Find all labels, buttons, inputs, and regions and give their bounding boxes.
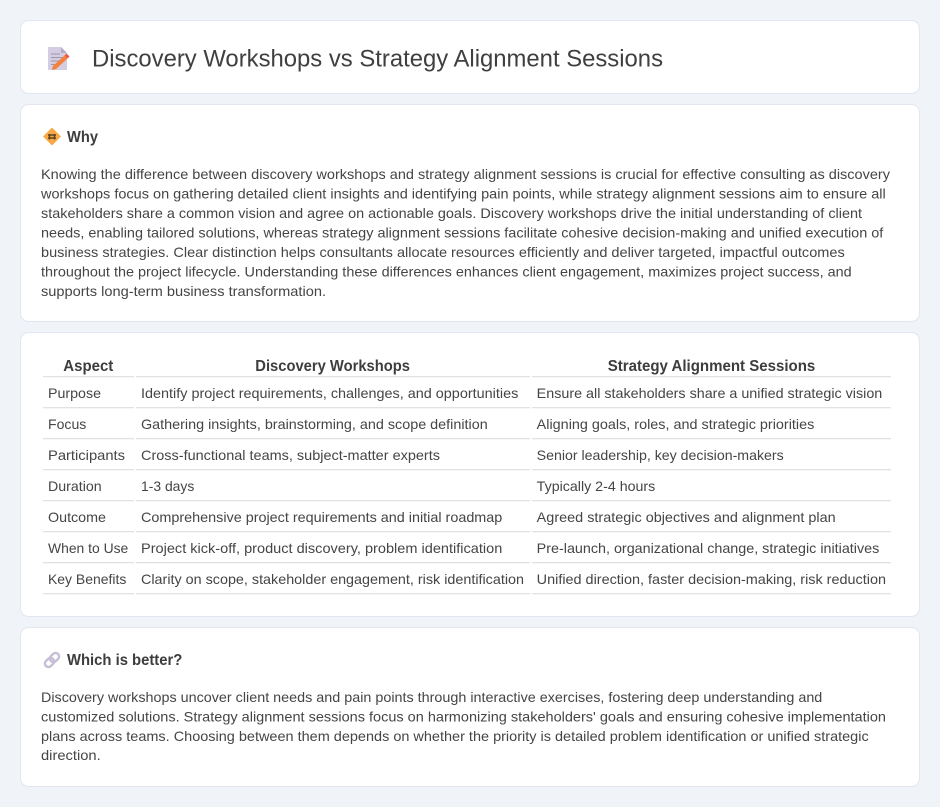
row: duration: 1-3 days (141, 478, 194, 494)
row: purpose (48, 385, 882, 401)
row: outcome (48, 509, 836, 525)
text block: why paragraph: throughout the project lifecycle. Understanding these differences enhances client engagement, maximizes project success, and (41, 264, 852, 280)
row: when to use (48, 540, 879, 556)
panel: why (20, 104, 920, 322)
text block: why paragraph: stakeholders share a common vision and agree on actionable goals. Discovery workshops drive the initial understanding of client (41, 205, 862, 221)
text block: why paragraph: business strategies. Clear distinction helps consultants allocate resources efficiently and deliver targeted, impactful outcomes (41, 244, 845, 260)
row: outcome: Agreed strategic objectives and alignment plan (537, 509, 836, 525)
heading: which is better: Which is better? (67, 652, 182, 669)
heading: why: Why (67, 129, 98, 146)
text block: which paragraph: direction. (41, 747, 101, 763)
text block: why paragraph: Knowing the difference between discovery workshops and strategy alignment sessions is crucial for effective consulting as discovery (41, 166, 890, 182)
row: key benefits: Clarity on scope, stakeholder engagement, risk identification (141, 571, 524, 587)
row: duration (48, 478, 655, 494)
row: focus: Gathering insights, brainstorming, and scope definition (141, 416, 488, 432)
text block: why paragraph: supports long-term business transformation. (41, 283, 326, 299)
row: when to use: Project kick-off, product discovery, problem identification (141, 540, 502, 556)
table header row: Discovery Workshops (255, 358, 410, 375)
row: when to use: Pre-launch, organizational change, strategic initiatives (537, 540, 879, 556)
row: participants (48, 447, 784, 463)
row: outcome: Outcome (48, 509, 106, 525)
row: duration: Typically 2-4 hours (537, 478, 655, 494)
row: participants: Participants (48, 447, 125, 463)
row: focus: Aligning goals, roles, and strategic priorities (537, 416, 814, 432)
text block: which paragraph (41, 689, 886, 763)
text block: which paragraph: plans across teams. Choosing between them depends on whether the priority is detailed problem identification or unified strategic (41, 728, 869, 744)
row: participants: Cross-functional teams, subject-matter experts (141, 447, 440, 463)
row: when to use: When to Use (48, 540, 128, 556)
row: focus (48, 416, 814, 432)
text block: why paragraph (40, 166, 890, 299)
row: duration: Duration (48, 478, 102, 494)
row: outcome: Comprehensive project requirements and initial roadmap (141, 509, 503, 525)
table header row (63, 358, 815, 375)
icon: construction diamond (44, 128, 60, 144)
text block: why paragraph: workshops focus on gathering detailed client insights and identifying pain points, while strategy alignment sessions aim to ensure all (40, 186, 886, 202)
table header row: Aspect (63, 358, 114, 375)
row: focus: Focus (48, 416, 86, 432)
text block: which paragraph: Discovery workshops uncover client needs and pain points through interactive exercises, fostering deep understanding and (41, 689, 822, 705)
row: purpose: Ensure all stakeholders share a unified strategic vision (537, 385, 882, 401)
row: key benefits: Unified direction, faster decision-making, risk reduction (537, 571, 886, 587)
row: participants: Senior leadership, key decision-makers (537, 447, 784, 463)
row: purpose: Purpose (48, 385, 101, 401)
row: key benefits: Key Benefits (48, 571, 126, 587)
panel: title header (20, 20, 920, 94)
text block: why paragraph: needs, enabling tailored solutions, whereas strategy alignment sessions facilitate cohesive decision-making and unified execution of (41, 224, 883, 240)
row: purpose: Identify project requirements, challenges, and opportunities (141, 385, 518, 401)
table header row: Strategy Alignment Sessions (608, 358, 815, 375)
icon: memo with pencil (48, 47, 70, 70)
icon: link (43, 651, 61, 669)
panel: which is better (20, 628, 920, 786)
panel: comparison table (20, 332, 920, 616)
title: Discovery Workshops vs Strategy Alignment Sessions (92, 46, 663, 72)
text block: which paragraph: customized solutions. Strategy alignment sessions focus on harmonizing stakeholders' goals and ensuring cohesive implementation (41, 708, 886, 724)
row: key benefits (48, 571, 886, 587)
